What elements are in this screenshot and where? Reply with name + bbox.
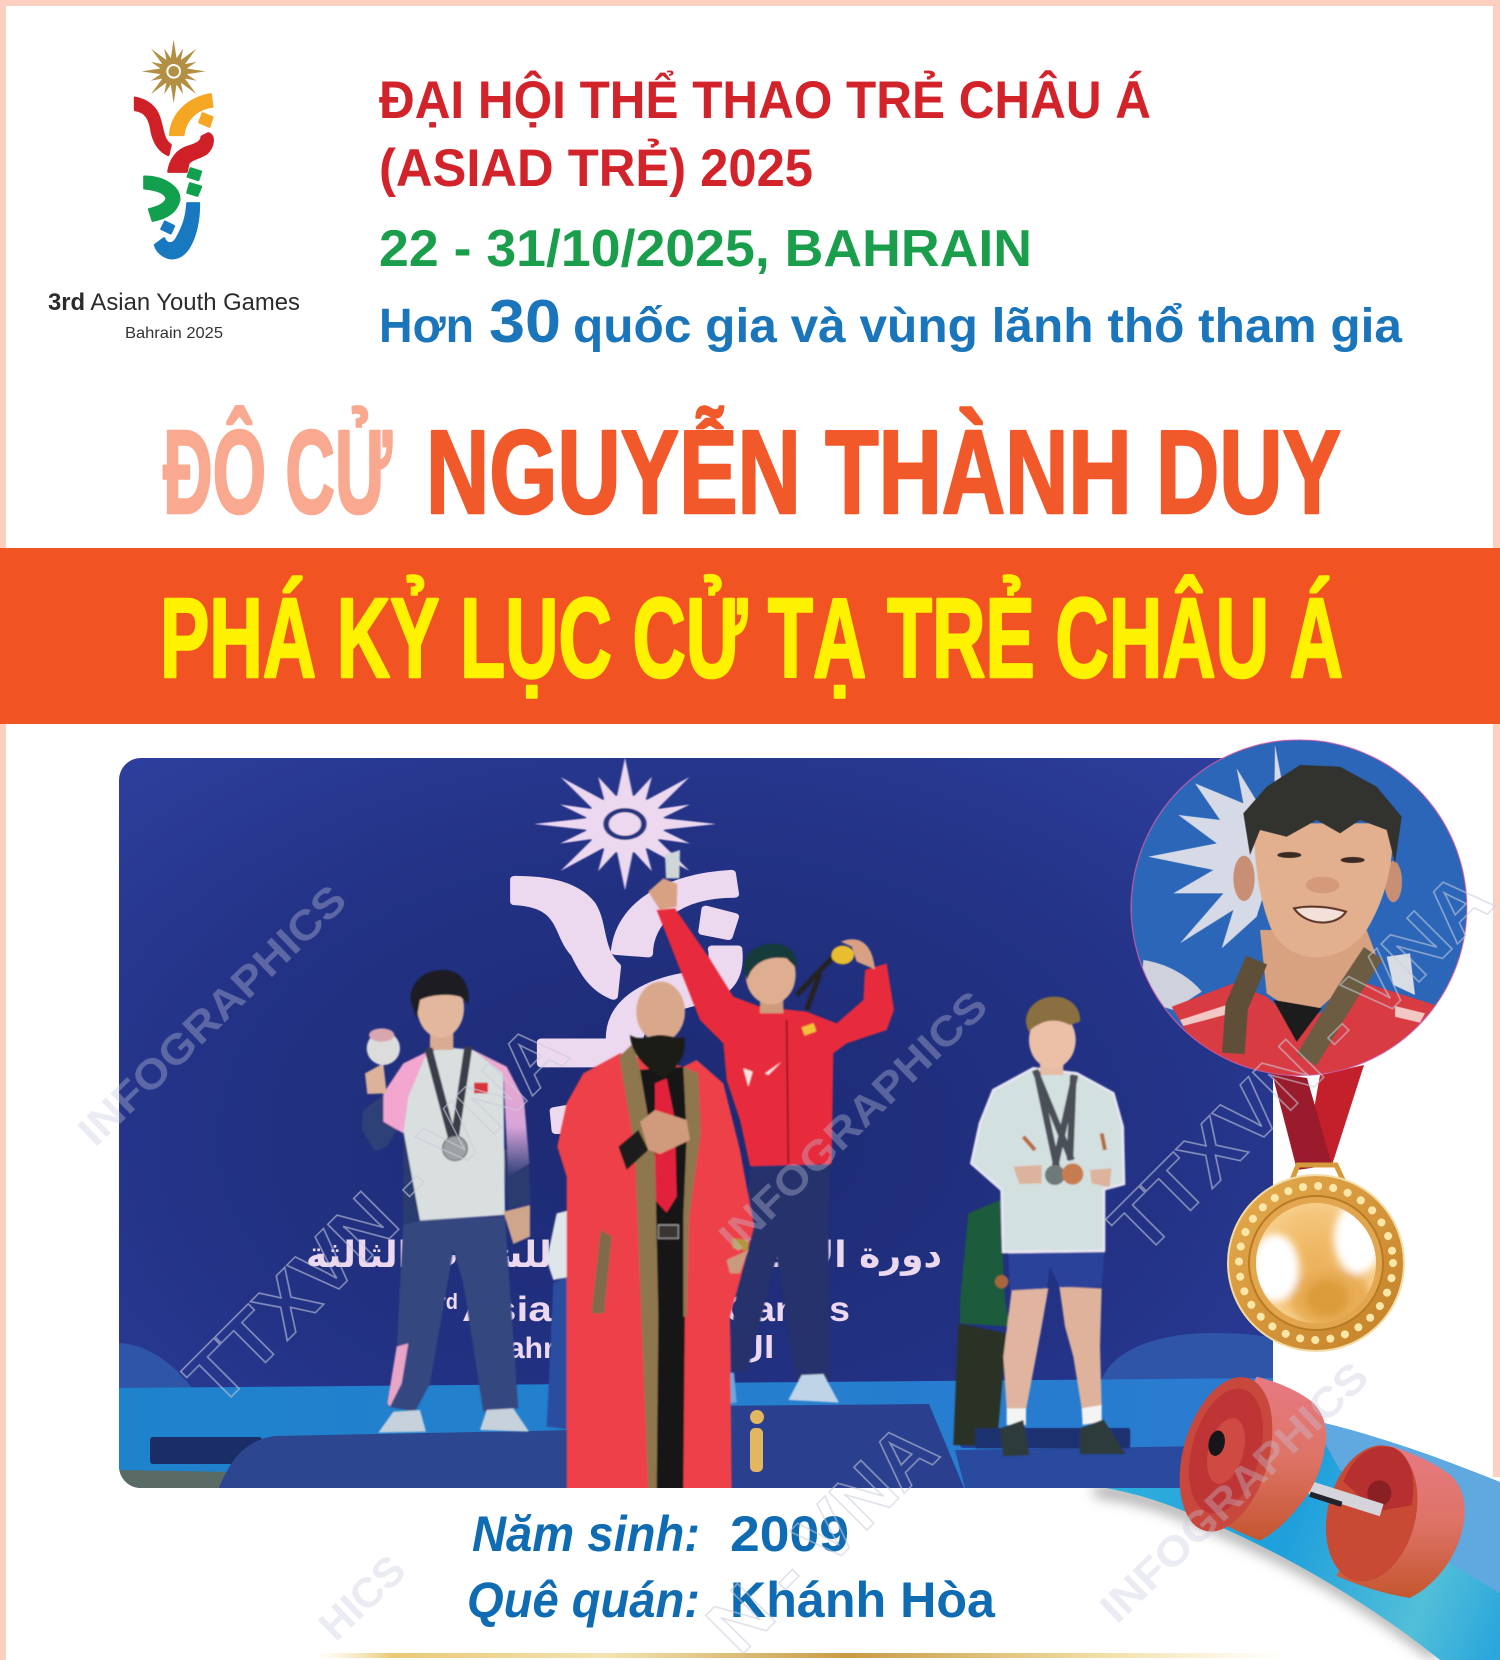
portrait star emblem (1140, 745, 1415, 1010)
shoes (1000, 1420, 1029, 1456)
belt buckle (658, 1225, 678, 1238)
left weight hole (1206, 1429, 1227, 1457)
portrait circle (1130, 739, 1470, 1077)
stage floor (119, 1378, 1273, 1488)
heading prefix: ĐÔ CỬ (163, 406, 392, 539)
portrait athlete (1172, 765, 1435, 1077)
backdrop side arcs (119, 1333, 1273, 1392)
eyes (1277, 852, 1301, 858)
birth year row: 2009 (730, 1506, 849, 1562)
backdrop English lettering (442, 1293, 848, 1322)
left weight face (1163, 1366, 1289, 1543)
outline watermark TTXVN-VNA (168, 854, 1500, 1660)
gold medalist athlete (648, 850, 894, 1166)
backdrop English lettering: Asian (462, 1290, 578, 1329)
backdrop Bahrain fragments (512, 1335, 772, 1362)
mascot (367, 1032, 400, 1065)
sweatshirt (971, 1068, 1124, 1252)
outline watermark TTXVN-VNA: TTXVN - VNA (168, 1006, 584, 1422)
backdrop sun emblem (534, 758, 716, 890)
bar (975, 1428, 1130, 1448)
cuff (618, 1130, 648, 1170)
flag patch (474, 1083, 488, 1093)
beard (630, 1035, 685, 1078)
bottom left floor (119, 1470, 230, 1488)
backdrop English lettering: Games (725, 1290, 850, 1329)
jacket (1172, 983, 1435, 1077)
event dates: 22 - 31/10/2025, BAHRAIN (379, 220, 1032, 278)
right barbell (960, 1428, 1130, 1448)
socks (1007, 1408, 1026, 1425)
dumbbell (1163, 1366, 1465, 1598)
participants line (379, 288, 1402, 355)
hand on chest (640, 1110, 690, 1154)
hair (1243, 765, 1402, 863)
black shirt and trousers (637, 1067, 687, 1490)
podium small logo (750, 1410, 764, 1472)
trousers (388, 1217, 518, 1412)
head (1040, 1060, 1063, 1075)
face (1253, 823, 1393, 957)
head (760, 990, 783, 1013)
right lapel band (683, 1067, 701, 1317)
title line 1: ĐẠI HỘI THỂ THAO TRẺ CHÂU Á (379, 69, 1151, 130)
photo backdrop (119, 758, 1273, 1488)
gold medal (1228, 1165, 1404, 1351)
robe (557, 1053, 754, 1490)
podium photo (119, 758, 1273, 1490)
emblem ribbons (135, 94, 213, 258)
nose (1306, 877, 1339, 893)
gold footer line (315, 1653, 1285, 1658)
logo emblem (135, 39, 213, 258)
medal ribbons (1035, 1070, 1075, 1167)
arm sleeves (362, 1094, 398, 1151)
medal ribbon (797, 957, 833, 1010)
participants line: Hơn (379, 300, 474, 353)
hometown row: Khánh Hòa (730, 1572, 996, 1628)
participants line: 30 (489, 288, 561, 355)
orange headline band (0, 548, 1500, 724)
watermark INFOGRAPHICS: HICS (309, 1546, 414, 1649)
neck (1260, 930, 1377, 1020)
backdrop ribbon emblem (515, 873, 738, 1131)
backdrop Bahrain fragments: ال (738, 1331, 774, 1366)
green jacket athlete behind (953, 1200, 1010, 1447)
watermark INFOGRAPHICS: INFOGRAPHICS (1091, 1352, 1377, 1631)
left lapel band (619, 1043, 658, 1490)
watermark INFOGRAPHICS: INFOGRAPHICS (69, 875, 355, 1154)
right fist (841, 939, 875, 969)
presenter in red robe (557, 982, 754, 1490)
dumbbell bar (1307, 1486, 1382, 1510)
hometown row: Quê quán: (467, 1572, 700, 1628)
portrait background (1130, 740, 1470, 1077)
people in photo (362, 850, 1130, 1490)
outline watermark TTXVN-VNA: TTXVN - VNA (1093, 854, 1500, 1270)
silver medalist athlete (362, 970, 531, 1433)
title line 2: (ASIAD TRẺ) 2025 (379, 138, 813, 198)
birth year row (472, 1506, 849, 1562)
medal chains (1233, 960, 1257, 1053)
participants line: quốc gia và vùng lãnh thổ tham gia (573, 300, 1402, 353)
birth year row: Năm sinh: (472, 1506, 700, 1562)
right weight face (1312, 1435, 1431, 1591)
raised fist (648, 878, 677, 910)
centre podium (730, 1404, 964, 1488)
ribbon of medal (1272, 1065, 1364, 1170)
hometown row (467, 1572, 996, 1628)
backdrop Bahrain fragments: ahr (508, 1332, 555, 1365)
emblem sun (142, 39, 206, 103)
pocket band (592, 1230, 612, 1313)
event title (379, 69, 1402, 355)
lower hand and watch (727, 1250, 748, 1273)
watermark INFOGRAPHICS: INFOGRAPHICS (710, 981, 996, 1260)
watermark INFOGRAPHICS (69, 875, 1377, 1649)
trophies (1023, 1133, 1105, 1150)
left barbell (150, 1437, 262, 1464)
gold medalist athlete trousers (727, 1163, 839, 1403)
main heading (163, 406, 1341, 539)
right weight side (1337, 1446, 1465, 1598)
person behind man (546, 1210, 568, 1430)
left podium (219, 1430, 575, 1488)
head (636, 982, 685, 1042)
wave ribbon (1095, 1420, 1500, 1660)
bronze medalist athlete (971, 997, 1130, 1456)
logo wordmark: 3rd Asian Youth Games (48, 289, 300, 316)
medal ribbon (428, 1047, 468, 1137)
right podium (955, 1446, 1184, 1488)
hands (365, 1063, 387, 1094)
left weight side (1190, 1377, 1326, 1540)
shoes (378, 1410, 426, 1433)
medal highlights (1251, 1202, 1382, 1328)
backdrop Arabic lettering: دورة الألعاب الآسيوية للشباب الثالثة (306, 1232, 942, 1276)
face and hair (428, 1032, 454, 1051)
shorts (1008, 1252, 1105, 1291)
tie (655, 1078, 677, 1213)
backdrop English lettering: rd (438, 1289, 458, 1314)
logo subline: Bahrain 2025 (125, 325, 223, 342)
mouth (1294, 907, 1346, 923)
jacket (657, 908, 894, 1166)
hands (1013, 1165, 1042, 1184)
legs (1003, 1288, 1048, 1410)
jacket (403, 1047, 505, 1221)
athlete profile (467, 1506, 996, 1628)
logo: 3rd Asian Youth Games (48, 39, 300, 342)
ears (1233, 856, 1255, 901)
